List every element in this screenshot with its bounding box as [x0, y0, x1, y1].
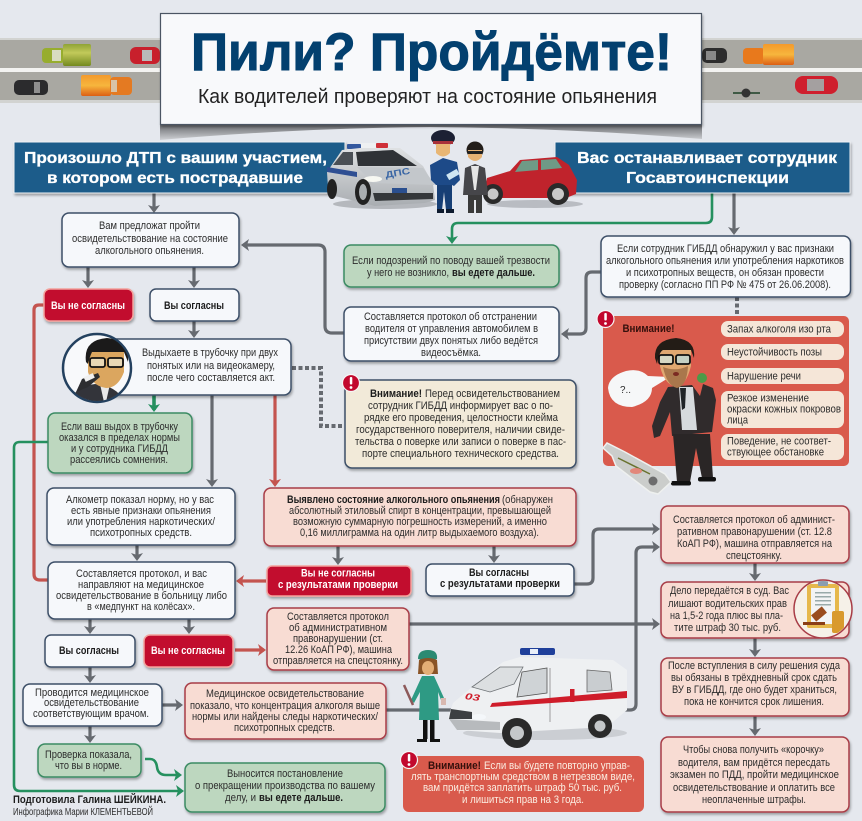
header: accident with victims: в котором есть пострадавшие	[47, 170, 303, 187]
illustration: doctor	[404, 650, 446, 742]
callout: attention before examination: рядке его проведения, целостности клейма	[364, 412, 559, 424]
sign: skin colour: окраски кожных покровов	[727, 404, 841, 416]
box: breathalyser: Выдыхаете в трубочку при двух	[142, 347, 278, 359]
icon: warning	[597, 310, 614, 328]
illustration: ambulance: 03	[464, 691, 481, 703]
heading: Пили? Пройдёмте!	[191, 23, 672, 82]
illustration: police car	[327, 143, 437, 209]
box: removal protocol: присутствии двух понятых либо ведётся	[364, 335, 538, 347]
box: removal protocol: видеосъёмка.	[421, 347, 481, 359]
box: get licence back	[661, 737, 849, 812]
button: agree second: Вы согласны	[59, 645, 119, 657]
box: norm but signs: есть явные признаки опьянения	[71, 505, 211, 517]
sign: skin colour: Резкое изменение	[727, 392, 809, 404]
button: disagree second: Вы не согласны	[151, 645, 225, 657]
box: breathalyser: после чего составляется акт.	[147, 372, 275, 384]
illustration: speech bubble	[608, 370, 670, 407]
box: breath within norm	[48, 413, 192, 473]
box: norm but signs: психотропных средств.	[90, 527, 192, 539]
credits: Подготовила Галина ШЕЙКИНА.	[13, 793, 166, 806]
box: medical examination: освидетельствование	[44, 697, 139, 709]
callout: attention before examination: государственного поверителя, наличии свиде-	[356, 424, 565, 436]
button: disagree with results	[267, 566, 411, 596]
icon: court gavel and coins	[794, 580, 852, 638]
box: intoxication detected	[264, 488, 576, 546]
illustration: red car	[483, 157, 583, 208]
button: disagree with results: Вы не согласны	[301, 568, 375, 580]
box: medical referral: Составляется протокол, и вас	[76, 568, 207, 580]
box: hand in licence: пока не кончится срок лишения.	[684, 696, 824, 708]
callout: attention before examination	[342, 374, 576, 468]
box: examination positive	[185, 683, 386, 739]
box: hand in licence	[661, 658, 849, 716]
callout: repeat offence: лять транспортным средством в нетрезвом виде,	[411, 771, 635, 783]
credits	[13, 793, 166, 818]
box: no suspicion	[344, 245, 559, 287]
box: case closed	[185, 763, 385, 812]
box: hand in licence: вы обязаны в трёхдневный срок сдать	[671, 672, 837, 684]
box: protocol 12.8	[661, 506, 849, 563]
box: medical examination: соответствующим врачом.	[33, 708, 149, 720]
box: case closed: делу, и	[225, 792, 256, 804]
panel: signs of intoxication	[597, 310, 849, 466]
box: court: на 1,5-2 года плюс вы пла-	[670, 610, 783, 622]
icon: warning	[342, 374, 360, 392]
button: agree with results: Вы согласны	[469, 567, 529, 579]
button: agree with results	[426, 564, 574, 596]
box: court	[661, 582, 849, 638]
box: protocol 12.26: 12.26 КоАП РФ), машина	[285, 644, 393, 656]
box: protocol 12.26	[267, 608, 409, 670]
box: medical referral: в «медпункт на колёсах».	[87, 601, 195, 613]
illustration: bottle	[603, 443, 671, 494]
sign: instability	[721, 344, 844, 360]
header: stopped by inspector	[555, 142, 850, 193]
title shadow	[160, 125, 702, 140]
box: breathalyser: понятых или на видеокамеру,	[147, 360, 275, 372]
box: medical examination	[23, 684, 162, 726]
callout: repeat offence: Внимание!	[428, 760, 481, 772]
box: removal protocol	[344, 307, 559, 361]
callout: repeat offence	[400, 752, 644, 812]
callout: repeat offence: и лишиться прав на 3 года.	[462, 794, 584, 806]
sign: instability: Неустойчивость позы	[727, 346, 822, 358]
box: removal protocol: водителя от управления автомобилем в	[365, 323, 538, 335]
callout: attention before examination: тельства о поверке или записи о поверке в пас-	[355, 436, 566, 448]
box: case closed: о прекращении производства по вашему	[195, 780, 375, 792]
box: intoxication detected: Выявлено состояние алкогольного опьянения	[287, 494, 500, 506]
box: examination positive: показало, что концентрация алкоголя выше	[190, 700, 380, 712]
button: agree second	[45, 635, 135, 667]
credits: Инфографика Марии КЛЕМЕНТЬЕВОЙ	[13, 805, 153, 818]
box: examination positive: психотропных средств.	[234, 722, 335, 734]
box: protocol 12.8: Составляется протокол об админист-	[673, 514, 835, 526]
button: disagree with results: с результатами проверки	[278, 579, 398, 591]
callout: repeat offence: вам придётся заплатить штраф 50 тыс. руб.	[423, 782, 622, 794]
header: accident with victims	[14, 142, 345, 193]
box: breathalyser	[100, 339, 291, 395]
box: no suspicion: вы едете дальше.	[452, 267, 535, 279]
button: agree	[150, 289, 239, 321]
callout: repeat offence: Если вы будете повторно управ-	[484, 760, 630, 772]
title panel	[160, 14, 702, 124]
sign: behaviour	[721, 434, 844, 460]
box: get licence back: экзамен по ПДД, пройти медицинское	[670, 769, 839, 781]
button: disagree	[44, 289, 133, 321]
box: intoxication detected: 0,16 миллиграмма на один литр выдыхаемого воздуха).	[300, 527, 539, 539]
callout: attention before examination: Внимание!	[370, 388, 422, 400]
box: intoxication detected: возможную суммарную погрешность измерений, а именно	[293, 516, 547, 528]
sign: behaviour: Поведение, не соответ-	[727, 436, 831, 448]
subtitle: Как водителей проверяют на состояние опьянения	[198, 86, 657, 108]
box: court: лишают водительских прав	[668, 598, 787, 610]
box: check ok: Проверка показала,	[45, 749, 132, 761]
box: protocol 12.26: правонарушении (ст.	[293, 633, 383, 645]
button: agree with results: с результатами проверки	[440, 578, 560, 590]
box: offer of examination	[62, 213, 239, 267]
illustration: driver	[463, 142, 488, 213]
box: get licence back: Чтобы снова получить «корочку»	[683, 744, 824, 756]
box: protocol 12.8: ративном правонарушении (ст. 12.8	[677, 526, 832, 538]
button: disagree: Вы не согласны	[51, 300, 125, 312]
box: court: тите штраф 30 тыс. руб.	[674, 622, 781, 634]
box: offer of examination: Вам предложат пройти	[99, 220, 200, 232]
box: removal protocol: Составляется протокол об отстранении	[364, 311, 537, 323]
callout: attention before examination: сотрудник ГИБДД информирует вас о по-	[368, 400, 553, 412]
sign: skin colour: лица	[727, 414, 749, 426]
box: protocol 12.26: об административном	[289, 622, 387, 634]
box: case closed: Выносится постановление	[227, 768, 343, 780]
box: no suspicion: Если подозрений по поводу вашей трезвости	[352, 255, 550, 267]
header: stopped by inspector: Госавтоинспекции	[626, 170, 789, 187]
box: case closed: вы едете дальше.	[259, 792, 343, 804]
box: breath within norm: и у сотрудника ГИБДД	[71, 443, 168, 455]
sign: speech: Нарушение речи	[727, 370, 801, 382]
box: protocol 12.8: спецстоянку.	[726, 550, 782, 562]
road with cars	[0, 38, 862, 103]
box: offer of examination: освидетельствование на состояние	[72, 233, 228, 245]
box: get licence back: неоплаченные штрафы.	[702, 794, 806, 806]
box: intoxication detected: (обнаружен	[502, 494, 553, 506]
box: breath within norm: рассеялись сомнения.	[70, 454, 168, 466]
box: get licence back: водителя, вам придётся пересдать	[678, 757, 830, 769]
box: protocol 12.26: Составляется протокол	[287, 611, 389, 623]
box: signs of intoxication found: и психотропных веществ, он обязан провести	[626, 267, 824, 279]
box: norm but signs	[47, 488, 235, 545]
box: hand in licence: ВУ в ГИБДД, где оно будет храниться,	[672, 684, 837, 696]
sign: smell: Запах алкоголя изо рта	[727, 324, 832, 336]
box: medical referral: освидетельствование в больницу либо	[56, 590, 227, 602]
header: stopped by inspector: Вас останавливает сотрудник	[577, 150, 837, 167]
box: check ok	[38, 744, 141, 777]
illustration: ambulance	[448, 648, 627, 748]
box: examination positive: Медицинское освидетельствование	[206, 688, 364, 700]
illustration: police officer	[430, 130, 460, 213]
header: accident with victims: Произошло ДТП с вашим участием,	[24, 150, 327, 167]
sign: behaviour: ствующее обстановке	[727, 446, 824, 458]
icon: man blowing into breathalyser	[63, 334, 131, 402]
callout: attention before examination: порте специального технического средства.	[362, 448, 559, 460]
illustration: police car: ДПС	[384, 166, 411, 180]
box: court: Дело передаётся в суд. Вас	[670, 585, 789, 597]
sign: speech	[721, 368, 844, 384]
box: medical referral	[48, 562, 235, 619]
illustration: speech bubble: ?..	[620, 385, 631, 396]
button: disagree second	[144, 635, 233, 667]
box: norm but signs: или употребления наркотических/	[67, 516, 216, 528]
box: protocol 12.26: отправляется на спецстоянку.	[273, 655, 403, 667]
box: check ok: что вы в норме.	[55, 760, 122, 772]
illustration: drunk man	[652, 338, 716, 486]
icon: warning	[400, 752, 418, 768]
box: breath within norm: оказался в пределах нормы	[59, 432, 180, 444]
box: medical examination: Проводится медицинское	[35, 687, 149, 699]
box: protocol 12.8: КоАП РФ), машина отправляется на	[677, 538, 833, 550]
callout: attention before examination: Перед освидетельствованием	[425, 388, 560, 400]
box: intoxication detected: абсолютный этиловый спирт в концентрации, превышающей	[289, 505, 551, 517]
panel: signs of intoxication: Внимание!	[622, 323, 674, 335]
box: no suspicion: у него не возникло,	[367, 267, 449, 279]
box: examination positive: нормы или найдены следы наркотических/	[192, 711, 379, 723]
button: agree: Вы согласны	[164, 300, 224, 312]
sign: skin colour	[721, 391, 844, 428]
box: norm but signs: Алкометр показал норму, но у вас	[66, 494, 214, 506]
box: signs of intoxication found	[601, 236, 850, 297]
box: breath within norm: Если ваш выдох в трубочку	[61, 421, 178, 433]
box: get licence back: освидетельствование и оплатить все	[673, 782, 835, 794]
box: medical referral: направляют на медицинское	[78, 579, 204, 591]
arrows and connectors	[14, 193, 755, 791]
box: offer of examination: алкогольного опьянения.	[95, 245, 204, 257]
